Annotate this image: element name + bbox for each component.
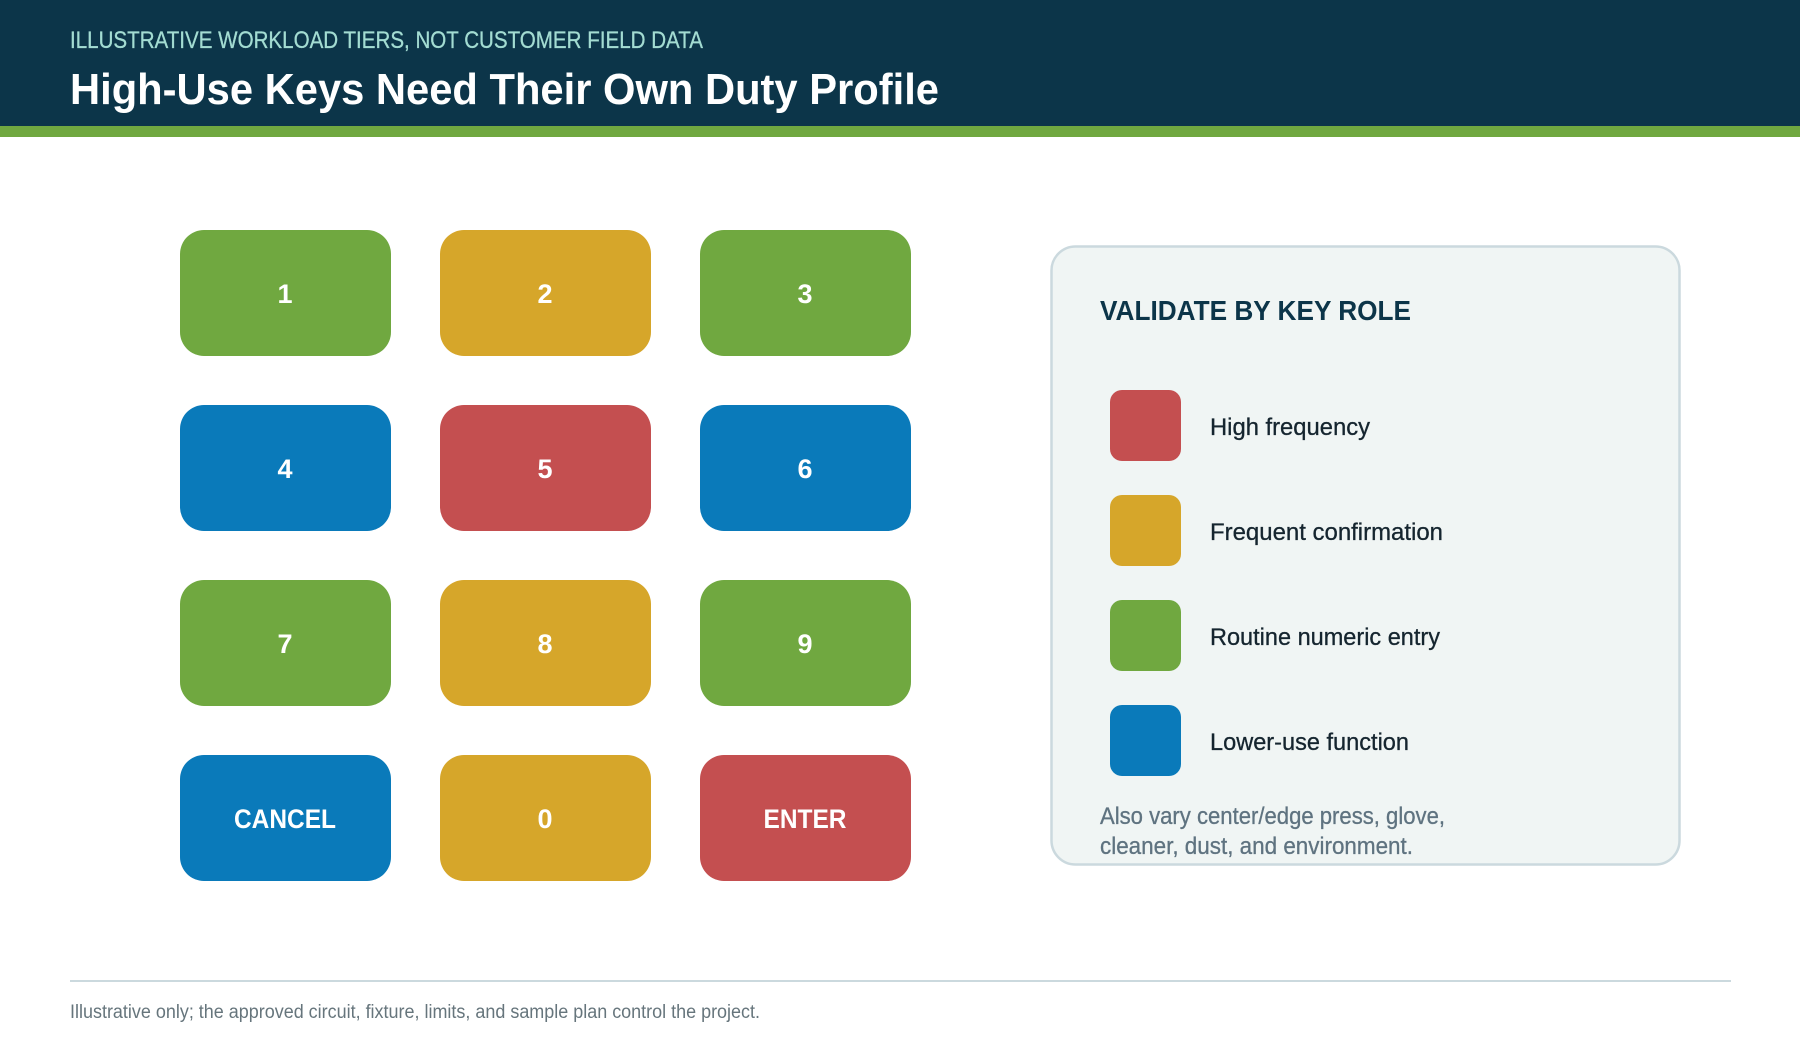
keypad [180,230,911,881]
key 8 [440,580,651,706]
legend: high frequency [1110,390,1370,461]
key 6: 6 [797,454,813,484]
key ENTER [700,755,911,881]
legend: lower-use function [1110,705,1409,776]
panel note: cleaner, dust, and environment. [1100,833,1413,860]
legend: high frequency: High frequency [1210,414,1370,441]
key 4: 4 [277,454,293,484]
key 0 [440,755,651,881]
title: High-Use Keys Need Their Own Duty Profile [70,65,939,114]
key 3: 3 [797,279,813,309]
key 8: 8 [537,629,553,659]
key 4 [180,405,391,531]
legend: frequent confirmation [1110,495,1443,566]
legend: frequent confirmation: Frequent confirmation [1210,519,1443,546]
key 3 [700,230,911,356]
panel note: Also vary center/edge press, glove, [1100,803,1445,830]
key ENTER: ENTER [764,804,846,834]
legend: routine numeric entry: Routine numeric entry [1210,624,1440,651]
key 9: 9 [797,629,813,659]
key 0: 0 [537,804,553,834]
key 7 [180,580,391,706]
key 7: 7 [277,629,293,659]
legend: routine numeric entry [1110,600,1440,671]
key 5 [440,405,651,531]
key 2: 2 [537,279,553,309]
key 1: 1 [277,279,293,309]
panel note [1100,803,1445,860]
panel: validate by key role [1052,246,1680,864]
key CANCEL: CANCEL [234,804,336,834]
key CANCEL [180,755,391,881]
key 5: 5 [537,454,553,484]
key 9 [700,580,911,706]
eyebrow text: ILLUSTRATIVE WORKLOAD TIERS, NOT CUSTOMER FIELD DATA [70,27,703,54]
footer note: Illustrative only; the approved circuit, fixture, limits, and sample plan control the project. [70,1002,760,1023]
panel heading: VALIDATE BY KEY ROLE [1100,295,1411,326]
header band [0,0,1800,137]
legend: lower-use function: Lower-use function [1210,729,1409,756]
key 1 [180,230,391,356]
key 6 [700,405,911,531]
key 2 [440,230,651,356]
